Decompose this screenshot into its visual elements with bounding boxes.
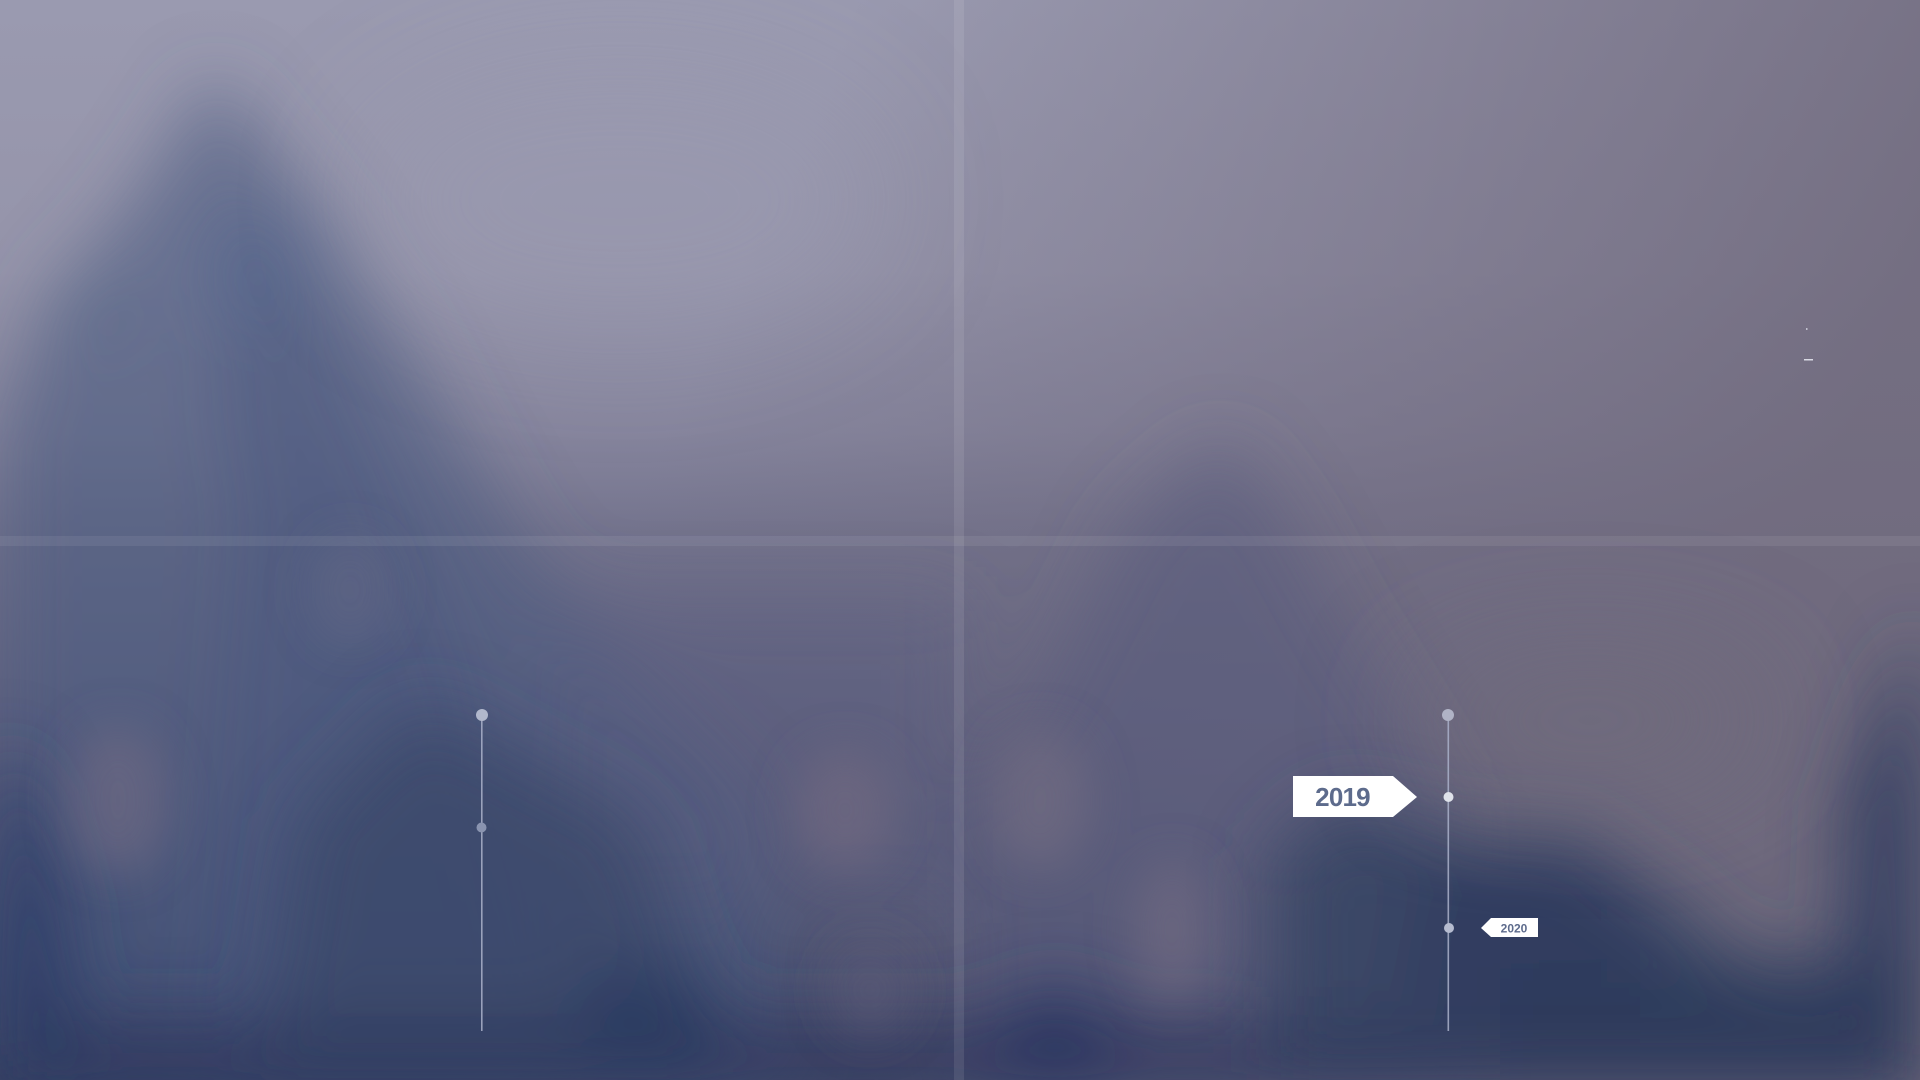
left timeline: second node (476, 822, 486, 832)
tiny mark: dot (1806, 328, 1808, 330)
label: 2019 arrow tag: 2019 (1315, 782, 1370, 812)
right timeline: top node (1442, 709, 1454, 721)
left timeline (476, 709, 488, 1031)
label: 2020 arrow tag: 2020 (1501, 922, 1528, 936)
label: 2019 arrow tag (1293, 776, 1417, 817)
right timeline: 2019 node (1444, 792, 1454, 802)
label: 2020 arrow tag (1481, 918, 1538, 937)
left timeline: top node (476, 709, 488, 721)
right timeline: 2020 node (1444, 923, 1454, 933)
right timeline (1442, 709, 1454, 1031)
tiny mark: dash (1804, 359, 1813, 360)
